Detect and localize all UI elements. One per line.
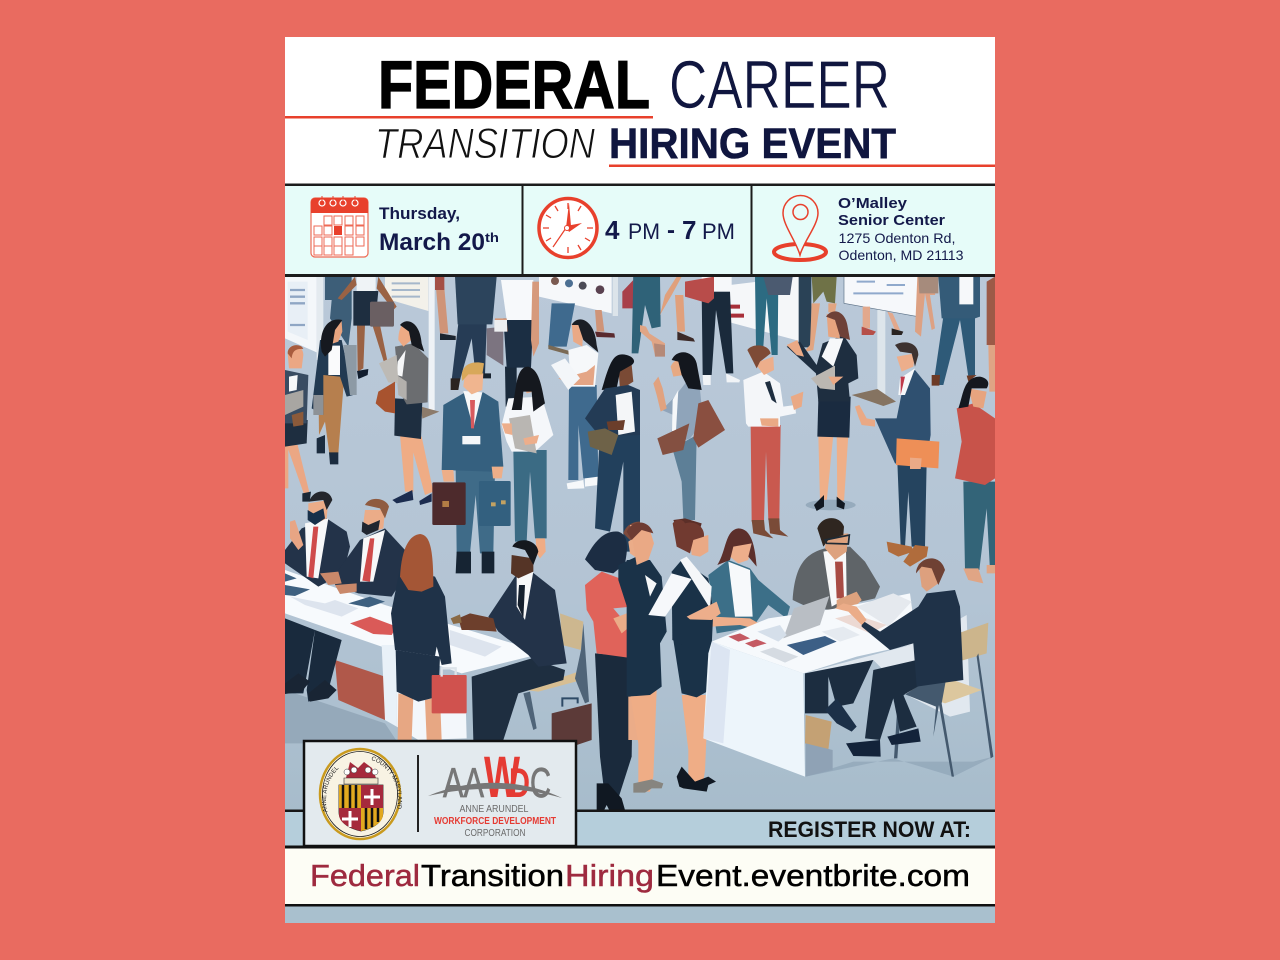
date text: Thursday, <box>379 204 460 223</box>
front left table and people <box>285 491 640 815</box>
visitor: rust dress, right edge <box>987 277 995 392</box>
time text: PM <box>702 219 735 244</box>
recruiter: bearded man left <box>285 491 350 587</box>
briefcase: brown on floor <box>552 698 592 753</box>
venue text: 1275 Odenton Rd, <box>838 230 956 246</box>
info band <box>285 184 995 277</box>
poster <box>285 37 995 923</box>
visitor: jeans, top left <box>632 277 695 357</box>
register label: REGISTER NOW AT: <box>768 817 971 842</box>
venue text: O’Malley <box>838 195 908 212</box>
poster board centre left <box>385 277 439 419</box>
AAWDC logo: AA <box>443 759 484 806</box>
time text: PM <box>628 219 660 244</box>
back row of the crowd, right half <box>632 277 995 583</box>
register band <box>285 810 995 848</box>
time text <box>605 215 735 245</box>
date text: March 20 <box>379 229 485 256</box>
visitor: man in blue suit <box>442 362 503 573</box>
logo panel <box>302 740 578 846</box>
poster board right <box>844 277 918 406</box>
candidate seated from behind, with chair <box>835 558 993 777</box>
visitor: woman in grey cardigan <box>653 352 725 532</box>
visitor: woman left edge <box>285 345 311 502</box>
visitor: woman in white blouse <box>502 367 553 558</box>
visitor: legs, back left <box>436 286 604 340</box>
poster board centre <box>539 277 618 316</box>
registration URL: Transition <box>421 858 564 893</box>
visitor: woman with grey bag <box>338 277 397 379</box>
AAWDC logo: W <box>484 745 520 810</box>
registration URL <box>310 858 970 893</box>
visitor: woman in black skirt suit <box>787 311 858 511</box>
visitor: man in navy from behind <box>451 277 497 390</box>
bottom strip <box>285 906 995 923</box>
visitor: woman in red blazer <box>955 377 995 583</box>
title: Federal: FEDERAL <box>378 47 650 123</box>
icon: clock <box>539 198 597 258</box>
visitor: woman in grey jacket <box>376 321 433 505</box>
poster board left <box>285 277 323 360</box>
venue text <box>838 195 964 263</box>
visitor: man with jeans and bag <box>755 277 793 355</box>
visitor: woman in teal jacket <box>708 528 790 633</box>
logo divider <box>417 755 419 832</box>
AAWDC logo <box>428 745 562 810</box>
visitor: woman in white tee <box>551 319 598 489</box>
back row of the crowd, left half <box>285 277 640 573</box>
visitor: man with red bag <box>685 277 740 385</box>
visitor: woman in white top and apron <box>487 280 539 407</box>
reception table right <box>703 593 970 777</box>
AAWDC logo: D <box>509 759 530 806</box>
visitor: woman in coral top <box>585 531 640 815</box>
visitor: woman with bun and paper <box>648 519 721 792</box>
county seal: ANNE ARUNDEL <box>322 767 339 812</box>
county seal: COUNTY MARYLAND <box>372 756 402 809</box>
AAWDC name: CORPORATION <box>464 827 526 839</box>
visitor: red bag edge <box>622 277 634 308</box>
title underline right <box>609 164 995 167</box>
AAWDC name: WORKFORCE DEVELOPMENT <box>434 815 556 827</box>
seated recruiter <box>451 540 589 740</box>
title: Transition: TRANSITION <box>375 120 596 168</box>
booth panel <box>730 277 811 347</box>
reception table left <box>285 570 535 743</box>
URL band <box>285 846 995 906</box>
illustration: career fair crowd <box>285 277 995 815</box>
recruiter: grey jacket man <box>793 518 880 610</box>
registration URL: Hiring <box>565 858 654 893</box>
AAWDC name: ANNE ARUNDEL <box>460 803 529 815</box>
title: Hiring Event: HIRING EVENT <box>609 120 896 168</box>
visitor: olive shorts <box>803 277 837 352</box>
AAWDC logo: C <box>530 759 551 806</box>
icon: map pin <box>774 196 826 260</box>
date text: th <box>485 230 499 245</box>
registration URL: Event.eventbrite.com <box>656 858 970 893</box>
title: Career: CAREER <box>669 47 890 123</box>
briefcase: brown <box>432 482 466 525</box>
front right table and people <box>627 518 993 793</box>
shoes: recruiters <box>285 673 337 702</box>
venue text: Senior Center <box>838 212 945 229</box>
date text <box>379 204 499 256</box>
visitor: dark-skinned woman <box>585 354 640 552</box>
venue text: Odenton, MD 21113 <box>838 247 964 263</box>
visitor: woman queue, navy suit <box>627 522 667 793</box>
AAWDC name <box>434 803 556 839</box>
time text: - <box>667 217 675 244</box>
visitor: woman from behind <box>391 534 467 740</box>
visitor: woman in tan trousers <box>312 320 357 464</box>
title block <box>285 47 995 168</box>
poster background panel <box>285 37 995 923</box>
title underline left <box>285 116 653 118</box>
county seal <box>318 748 402 840</box>
visitor: man in navy suit with orange folder <box>855 342 939 567</box>
visitor: woman in red trousers <box>743 345 803 538</box>
time text: 7 <box>682 215 696 245</box>
time text: 4 <box>605 215 620 245</box>
visitor: man in navy top right <box>932 277 980 386</box>
visitor: legs behind board <box>862 277 938 337</box>
registration URL: Federal <box>310 858 420 893</box>
laptop <box>757 596 829 642</box>
icon: calendar <box>311 196 368 257</box>
visitor: woman next in queue <box>618 522 640 740</box>
visitor: blue coat <box>325 277 352 347</box>
briefcase: blue <box>479 481 511 526</box>
recruiter: bearded man right <box>320 499 405 597</box>
table legs and bag <box>805 660 993 777</box>
